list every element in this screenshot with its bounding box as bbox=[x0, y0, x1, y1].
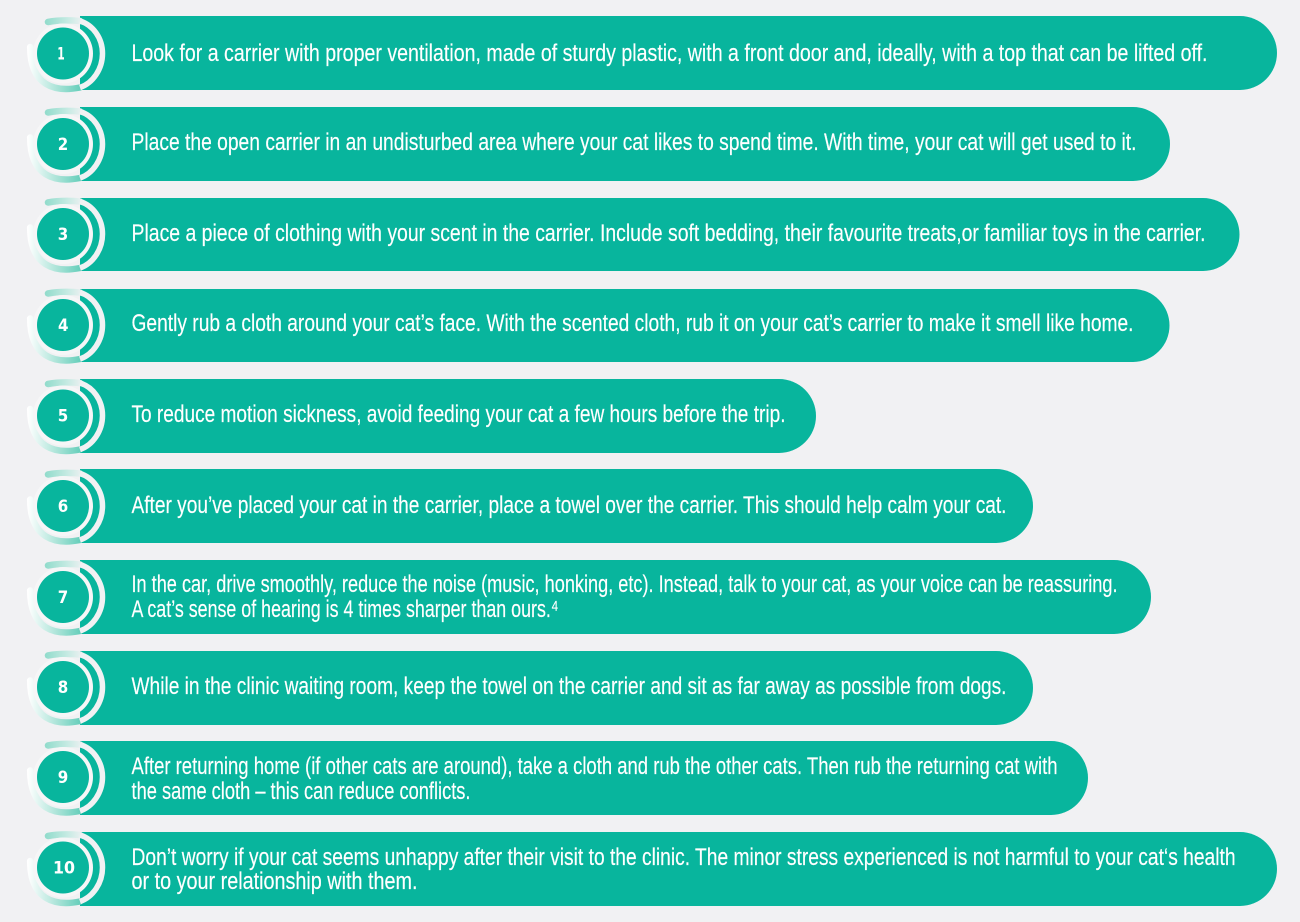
step 10 bbox=[30, 832, 1277, 906]
badge 6: 6 bbox=[58, 497, 68, 517]
bar 2 bbox=[80, 107, 1170, 181]
step 1 bbox=[30, 16, 1277, 90]
badge 1 bbox=[30, 20, 103, 89]
text 8: While in the clinic waiting room, keep the towel on the carrier and sit as far away as possible from dogs. bbox=[132, 673, 1006, 700]
step 6 bbox=[30, 469, 1033, 543]
badge 1: 1 bbox=[57, 44, 65, 64]
step 7 bbox=[30, 560, 1151, 634]
badge 10: 10 bbox=[53, 858, 75, 878]
text 6: After you’ve placed your cat in the carrier, place a towel over the carrier. This should help calm your cat. bbox=[132, 492, 1006, 519]
text 7: A cat’s sense of hearing is 4 times sharper than ours.⁴ bbox=[132, 596, 558, 623]
badge 9 bbox=[30, 744, 103, 812]
badge 7: 7 bbox=[58, 588, 68, 608]
text 10: or to your relationship with them. bbox=[132, 868, 418, 895]
text 10 bbox=[132, 844, 1236, 895]
step 8 bbox=[30, 651, 1033, 725]
badge 3 bbox=[30, 201, 103, 269]
bar 9 bbox=[80, 741, 1088, 815]
badge 5: 5 bbox=[58, 406, 68, 426]
badge 4: 4 bbox=[58, 316, 69, 336]
step 4 bbox=[30, 289, 1170, 362]
step 3 bbox=[30, 198, 1240, 271]
badge 2: 2 bbox=[58, 135, 68, 155]
badge 10 bbox=[30, 834, 103, 903]
step 5 bbox=[30, 379, 816, 453]
bar 3 bbox=[80, 198, 1240, 271]
badge 4 bbox=[30, 292, 103, 360]
badge 2 bbox=[30, 111, 103, 179]
step 9 bbox=[30, 741, 1088, 815]
bar 10 bbox=[80, 832, 1277, 906]
bar 7 bbox=[80, 560, 1151, 634]
step 2 bbox=[30, 107, 1170, 181]
text 9 bbox=[132, 753, 1058, 805]
bar 6 bbox=[80, 469, 1033, 543]
badge 7 bbox=[30, 564, 103, 632]
text 9: the same cloth – this can reduce conflicts. bbox=[132, 778, 470, 805]
badge 5 bbox=[30, 382, 103, 451]
bar 1 bbox=[80, 16, 1277, 90]
bar 4 bbox=[80, 289, 1170, 362]
badge 9: 9 bbox=[58, 768, 68, 788]
text 7 bbox=[132, 571, 1118, 623]
text 5: To reduce motion sickness, avoid feeding your cat a few hours before the trip. bbox=[132, 401, 786, 428]
badge 8: 8 bbox=[58, 678, 68, 698]
text 9: After returning home (if other cats are around), take a cloth and rub the other cats. Then rub the returning cat with bbox=[132, 753, 1058, 780]
badge 3: 3 bbox=[58, 225, 68, 245]
badge 8 bbox=[30, 654, 103, 722]
badge 6 bbox=[30, 473, 103, 541]
bar 5 bbox=[80, 379, 816, 453]
bar 8 bbox=[80, 651, 1033, 725]
